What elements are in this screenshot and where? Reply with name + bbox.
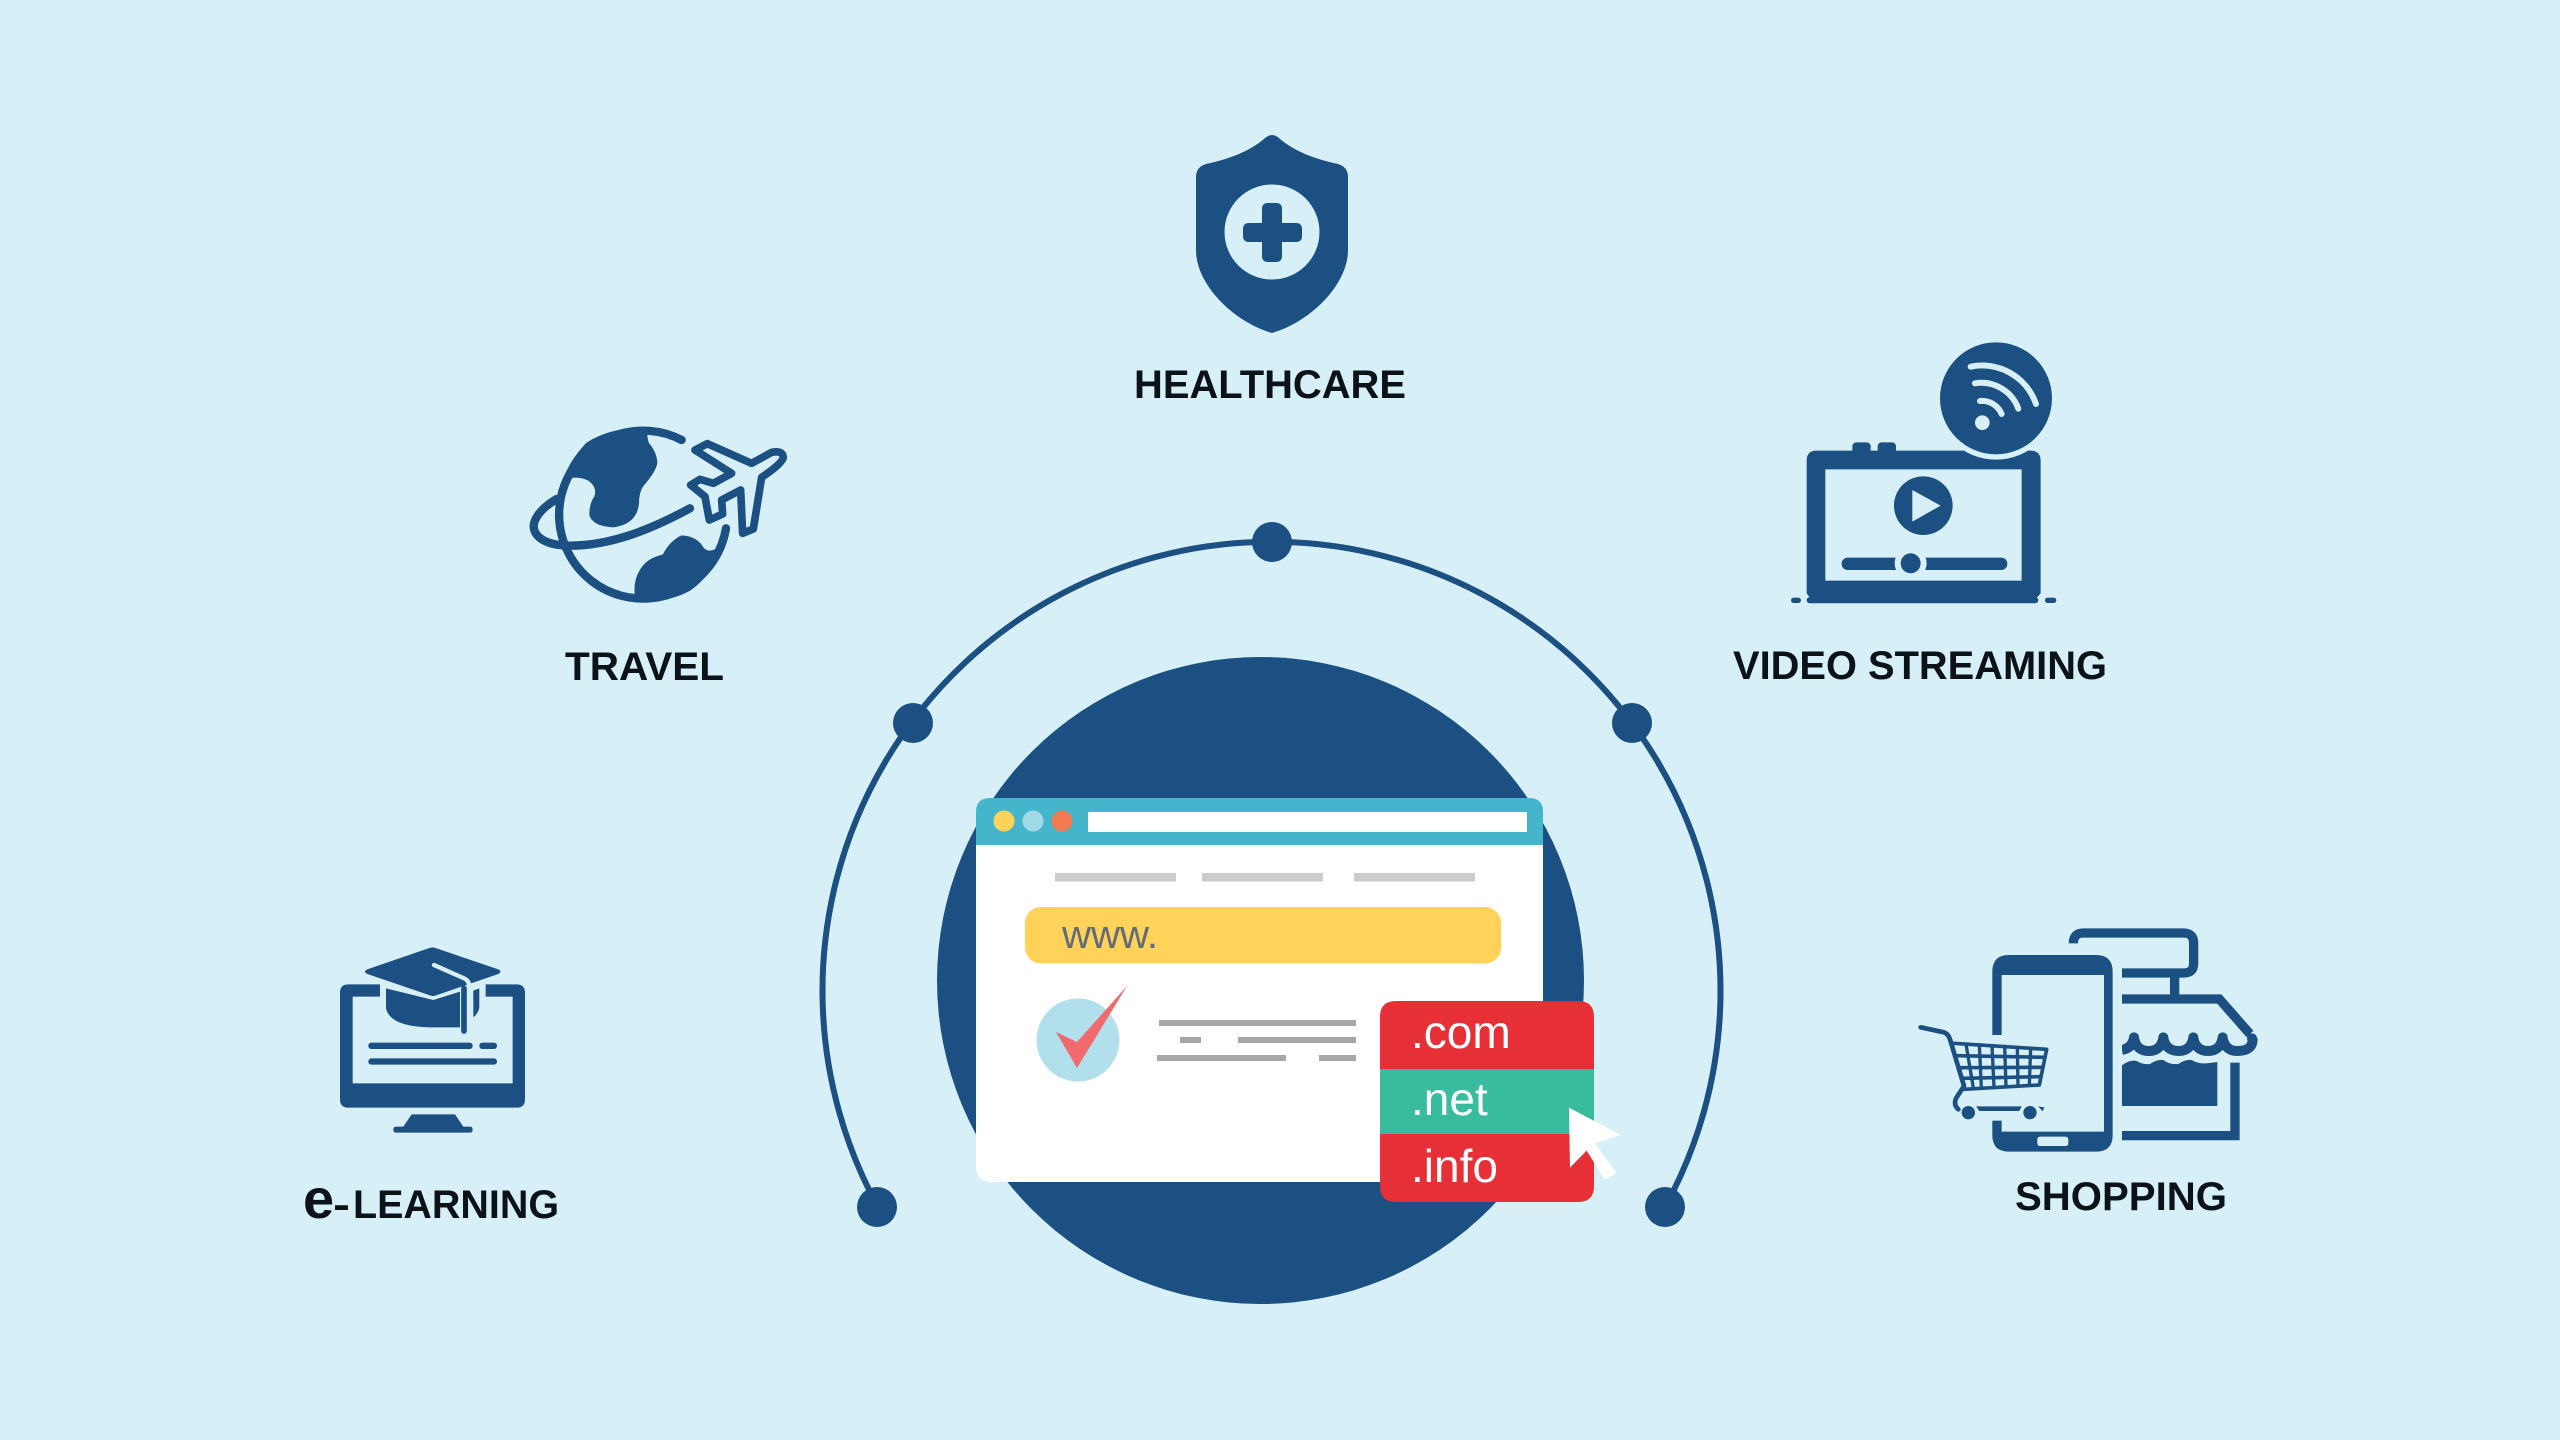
label: -: [333, 1183, 350, 1227]
panel: healthcare: [1134, 135, 1406, 407]
panel: e-learning: [303, 947, 559, 1230]
icon: globe and plane: [534, 429, 783, 600]
icon: video screen with wifi: [1791, 337, 2057, 603]
domain list panel: .info: [1411, 1140, 1498, 1192]
label: VIDEO STREAMING: [1733, 644, 2107, 688]
url bar: www.: [1061, 913, 1158, 957]
icon: monitor and graduation cap: [340, 947, 525, 1133]
central dark circle: [937, 657, 1584, 1304]
browser window: [976, 798, 1543, 1182]
panel: travel: [534, 429, 783, 689]
panel: video streaming: [1733, 337, 2107, 688]
icon: phone, store and cart: [1921, 933, 2257, 1152]
text lines: [1157, 1020, 1356, 1061]
label: HEALTHCARE: [1134, 363, 1406, 407]
label: SHOPPING: [2015, 1175, 2227, 1219]
domain list panel: .com: [1411, 1006, 1511, 1058]
cursor: [1569, 1108, 1621, 1180]
label: e: [303, 1167, 334, 1230]
domain list panel: [1380, 1001, 1594, 1202]
store: [2073, 933, 2253, 1136]
label: TRAVEL: [565, 645, 724, 689]
arc connector with nodes: [822, 522, 1720, 1227]
phone: [1992, 955, 2113, 1152]
check badge: [1036, 986, 1127, 1082]
icon: shield: [1196, 135, 1348, 333]
url bar: [1025, 907, 1501, 964]
domain list panel: .net: [1411, 1073, 1488, 1125]
label: LEARNING: [353, 1183, 559, 1227]
cart: [1921, 1027, 2047, 1109]
panel: shopping: [1921, 933, 2257, 1219]
